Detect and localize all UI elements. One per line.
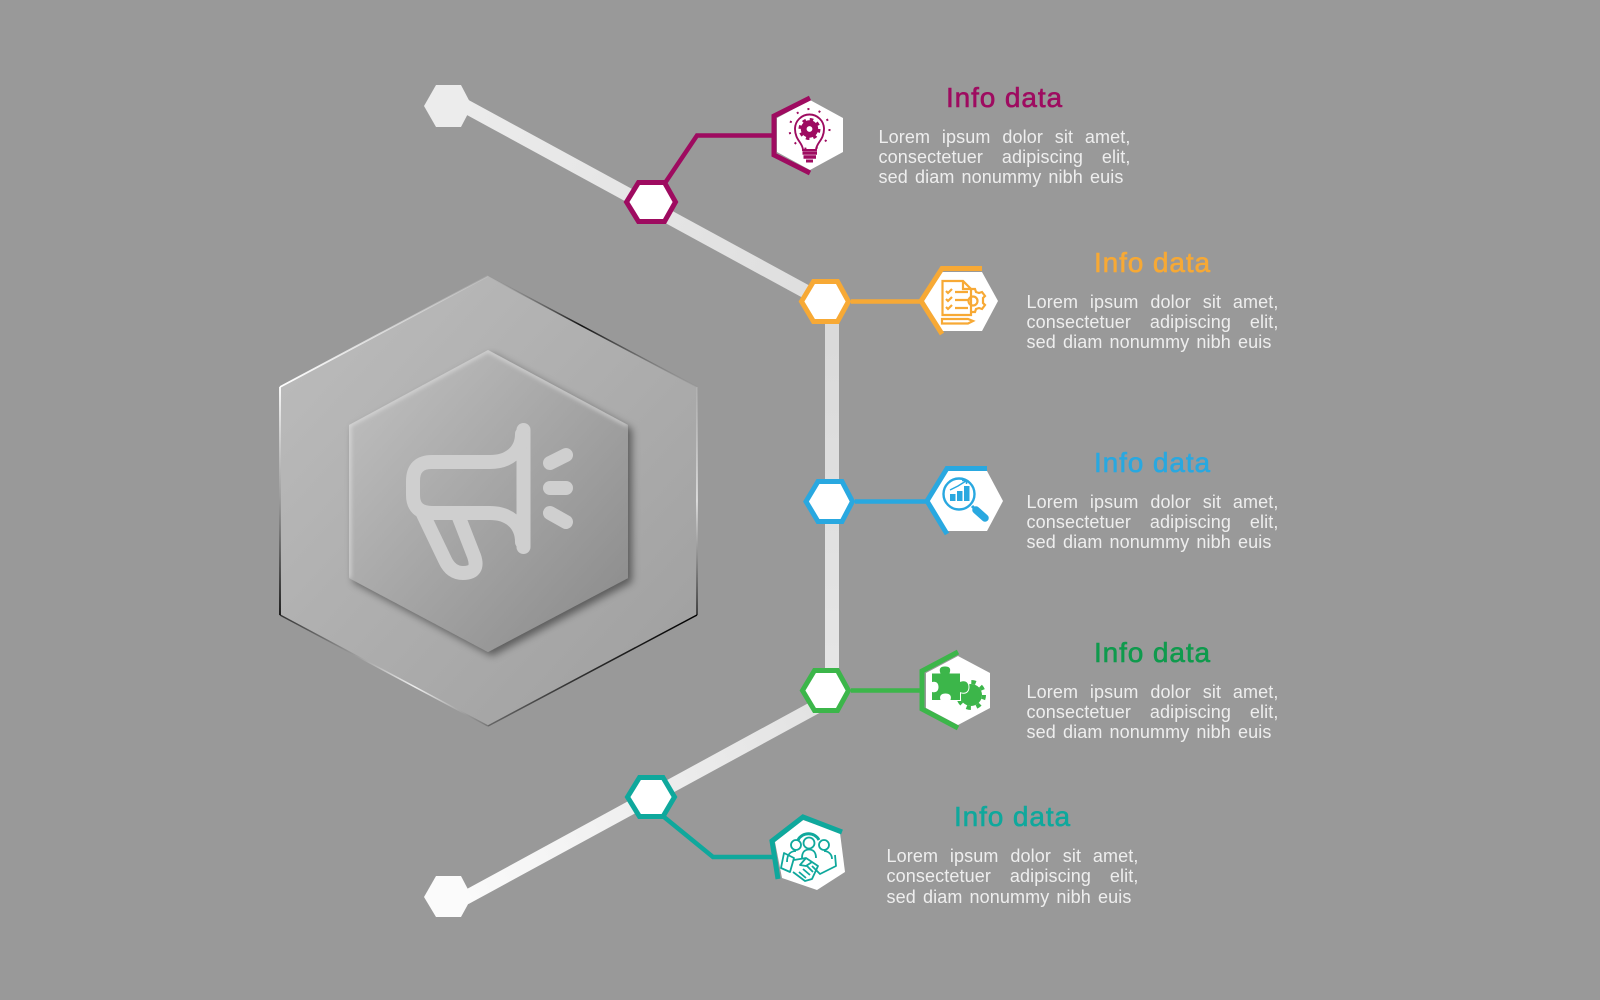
background track: top diagonal — [465, 106, 825, 302]
description: step 5: sed diam nonummy nibh euis — [886, 887, 1132, 907]
step 2: connector — [851, 299, 922, 304]
step 3: node — [806, 482, 852, 522]
text block: step 3 — [1026, 447, 1278, 552]
top end hexagon — [424, 85, 472, 127]
description: step 2: Lorem ipsum dolor sit amet, — [1026, 292, 1278, 312]
background track: vertical spine — [825, 310, 839, 685]
text block: step 5 — [886, 801, 1138, 907]
central glass hexagon — [280, 276, 697, 726]
icon: magnifier with bar chart — [944, 478, 985, 518]
description: step 3 — [1026, 492, 1278, 552]
heading: step 3: Info data — [1094, 447, 1211, 478]
bottom end hexagon — [424, 876, 472, 917]
step 2: icon hexagon with checklist — [921, 268, 998, 334]
description: step 1: consectetuer adipiscing elit, — [878, 147, 1130, 167]
description: step 1: sed diam nonummy nibh euis — [878, 167, 1124, 187]
step 1: connector — [665, 136, 776, 183]
description: step 2: sed diam nonummy nibh euis — [1026, 332, 1272, 352]
description: step 4: sed diam nonummy nibh euis — [1026, 722, 1272, 742]
description: step 3: Lorem ipsum dolor sit amet, — [1026, 492, 1278, 512]
icon: gear behind puzzle — [958, 682, 984, 708]
step 4: node — [802, 670, 848, 710]
icon: team and handshake — [781, 834, 836, 881]
heading: step 5: Info data — [954, 801, 1071, 832]
step 5: icon hexagon with team handshake — [772, 817, 845, 890]
description: step 5: Lorem ipsum dolor sit amet, — [886, 846, 1138, 866]
icon: puzzle piece — [932, 666, 968, 700]
step 4: connector — [851, 688, 923, 693]
step 3: connector — [855, 499, 928, 504]
heading: step 4: Info data — [1094, 637, 1211, 668]
description: step 2: consectetuer adipiscing elit, — [1026, 312, 1278, 332]
step 3: icon hexagon with magnifier — [927, 468, 1003, 534]
text block: step 1 — [878, 82, 1130, 187]
icon: megaphone — [413, 430, 566, 573]
description: step 5: consectetuer adipiscing elit, — [886, 866, 1138, 886]
inner hexagon — [349, 350, 628, 652]
description: step 4: consectetuer adipiscing elit, — [1026, 702, 1278, 722]
description: step 3: consectetuer adipiscing elit, — [1026, 512, 1278, 532]
description: step 1 — [878, 127, 1130, 187]
step 5: connector — [664, 817, 774, 857]
description: step 2 — [1026, 292, 1278, 352]
text block: step 4 — [1026, 637, 1278, 742]
icon: checklist document — [942, 281, 985, 324]
step 1: icon hexagon with lightbulb — [774, 98, 843, 173]
step 2: node — [802, 282, 848, 322]
description: step 3: sed diam nonummy nibh euis — [1026, 532, 1272, 552]
heading: step 1: Info data — [946, 82, 1063, 113]
step 5: node — [628, 778, 674, 816]
step 1: node — [626, 182, 676, 222]
description: step 1: Lorem ipsum dolor sit amet, — [878, 127, 1130, 147]
heading: step 2: Info data — [1094, 247, 1211, 278]
description: step 4 — [1026, 682, 1278, 742]
background track: bottom diagonal — [465, 702, 825, 898]
description: step 5 — [886, 846, 1138, 907]
description: step 4: Lorem ipsum dolor sit amet, — [1026, 682, 1278, 702]
text block: step 2 — [1026, 247, 1278, 352]
icon: lightbulb with gear — [790, 109, 830, 161]
step 4: icon hexagon with puzzle and gear — [922, 652, 990, 728]
